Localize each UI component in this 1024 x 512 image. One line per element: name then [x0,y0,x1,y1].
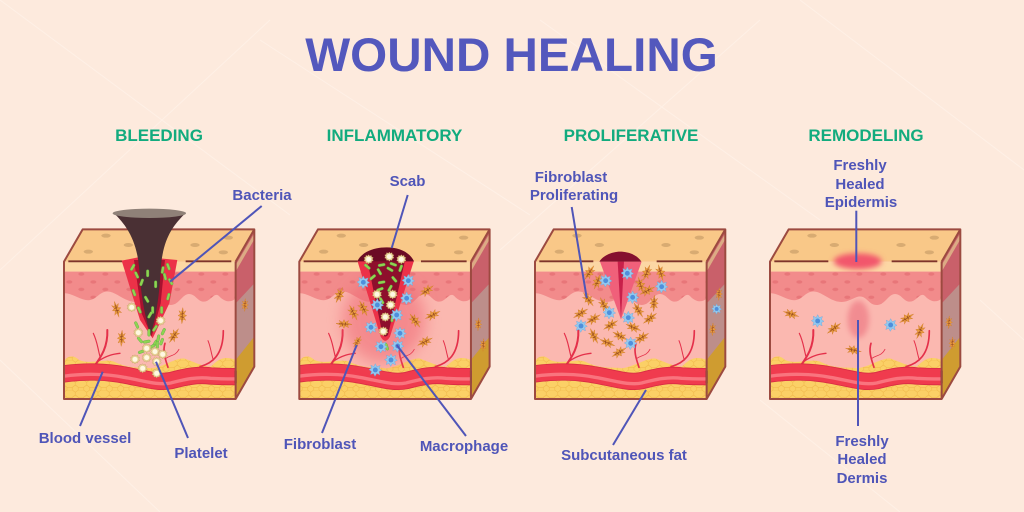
label: freshly healed dermis [835,320,889,487]
panel: proliferative skin block [532,229,725,399]
label: freshly healed dermis: Healed [837,451,887,468]
label: blood vessel: Blood vessel [39,430,131,447]
label: fibroblast proliferating: Proliferating [530,187,618,204]
label: blood vessel [39,372,131,447]
heading: bleeding: BLEEDING [115,126,203,145]
label: freshly healed epidermis [825,157,897,262]
title: WOUND HEALING [305,29,718,82]
label: subcutaneous fat [561,390,687,464]
panel: inflammatory skin block [296,229,490,399]
label: fibroblast proliferating: Fibroblast [535,169,607,186]
scab wound with immune cells [333,247,487,376]
healed scar areas and remaining cells [782,253,956,356]
label: freshly healed epidermis: Freshly [833,157,887,174]
panel: bleeding skin block [61,209,254,399]
heading: proliferative: PROLIFERATIVE [564,126,698,145]
label: fibroblast proliferating [530,169,618,298]
label: freshly healed dermis: Dermis [837,470,887,487]
label: scab: Scab [390,173,425,190]
label: bacteria: Bacteria [232,187,292,204]
label: freshly healed epidermis: Healed [835,176,885,193]
label: scab [390,173,425,248]
label: platelet [156,362,228,462]
label: macrophage [397,345,508,455]
label: bacteria [170,187,292,282]
label: freshly healed dermis: Freshly [835,433,889,450]
panel: remodeling skin block [767,229,960,399]
heading: remodeling: REMODELING [808,126,924,145]
label: subcutaneous fat: Subcutaneous fat [561,447,687,464]
label: freshly healed epidermis: Epidermis [825,194,897,211]
label: fibroblast: Fibroblast [284,436,356,453]
label: fibroblast [284,345,357,453]
label: platelet: Platelet [174,445,228,462]
label: macrophage: Macrophage [420,438,508,455]
heading: inflammatory: INFLAMMATORY [327,126,463,145]
wound with dark object and bacteria [110,209,248,378]
closing wound with proliferating fibroblasts [572,252,722,360]
